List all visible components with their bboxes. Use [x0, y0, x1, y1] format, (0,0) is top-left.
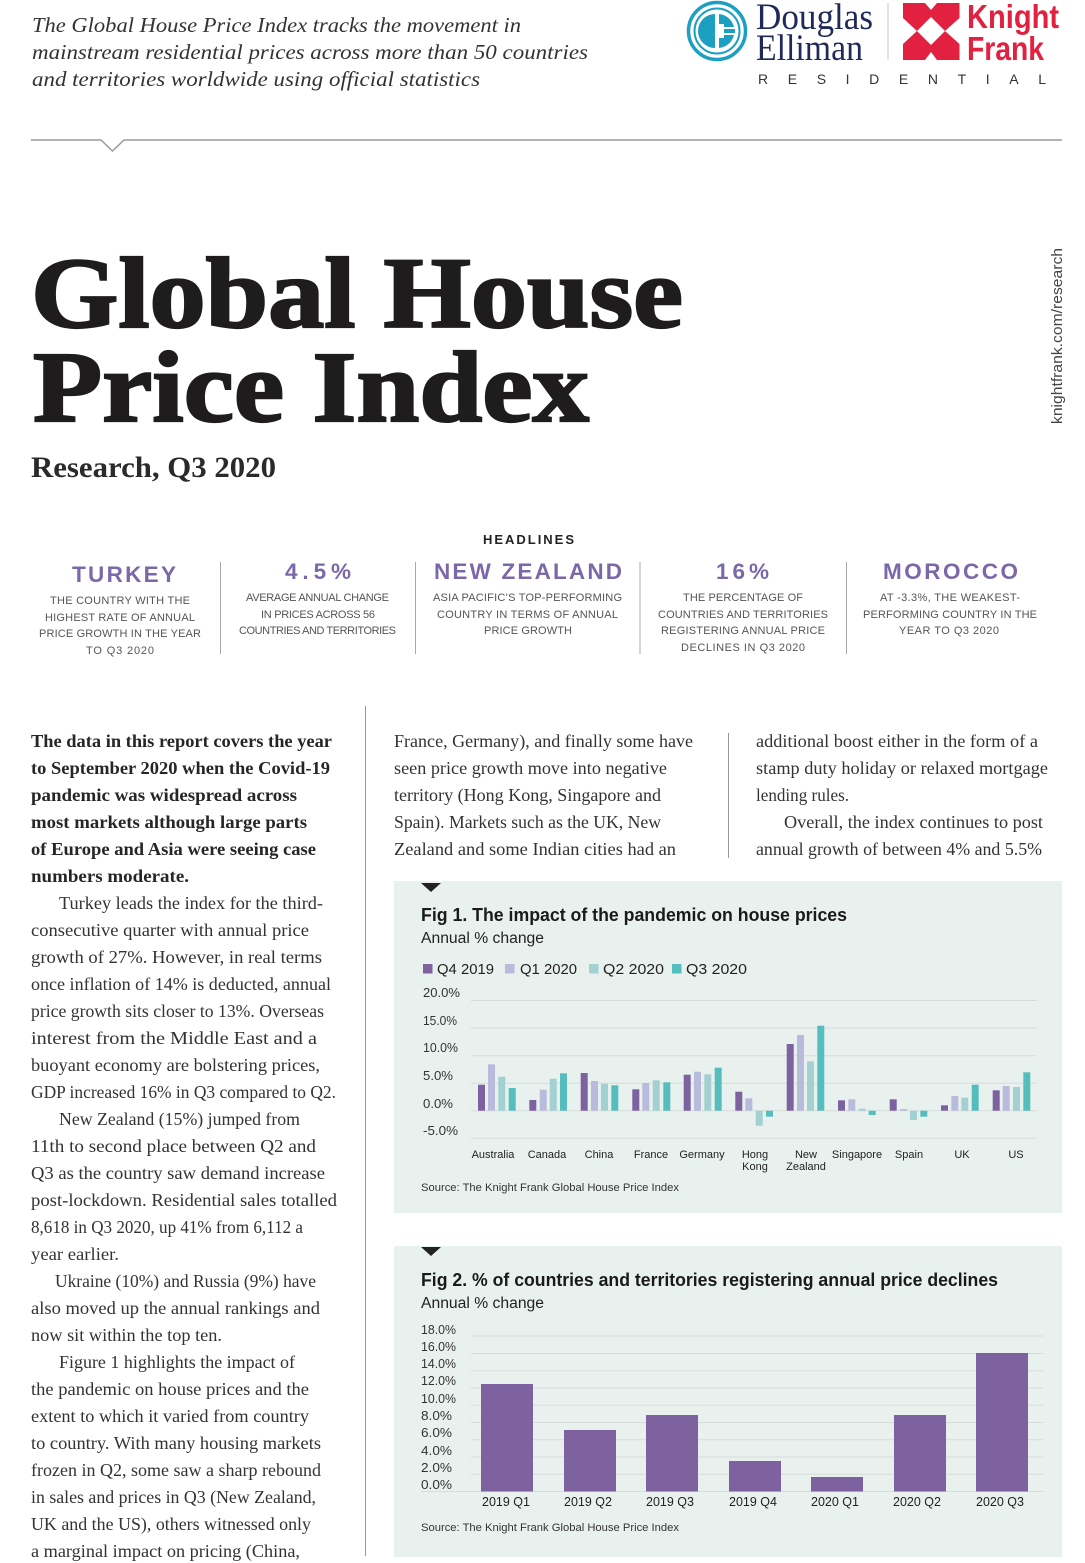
- headline: Morocco: PERFORMING COUNTRY IN THE: [863, 609, 1037, 621]
- logo: Residential: RESIDENTIAL: [758, 71, 1046, 87]
- title: [31, 237, 683, 443]
- body text column 3: additional boost either in the form of a: [756, 731, 1038, 751]
- body text column 1: to country. With many housing markets: [31, 1433, 321, 1453]
- Australia bars: [478, 1064, 516, 1111]
- intro paragraph in bold: pandemic was widespread across: [31, 785, 297, 805]
- Fig 2 period labels: 2019 Q3: [646, 1495, 694, 1509]
- body text column 1: Ukraine (10%) and Russia (9%) have: [55, 1271, 316, 1291]
- Fig 2 period labels: 2019 Q2: [564, 1495, 612, 1509]
- headline: 16%: DECLINES IN Q3 2020: [681, 642, 805, 654]
- body text column 3: [756, 731, 1048, 859]
- body text column 1: the pandemic on house prices and the: [31, 1379, 309, 1399]
- intro text: The Global House Price Index tracks the movement in: [32, 13, 521, 37]
- headline: 16%: THE PERCENTAGE OF: [683, 592, 803, 604]
- headline: Turkey: HIGHEST RATE OF ANNUAL: [45, 612, 195, 624]
- title: Price Index: [33, 331, 589, 443]
- Fig 1 bar chart: 20.0%: [423, 985, 460, 1000]
- intro paragraph in bold: numbers moderate.: [31, 866, 189, 886]
- headline: Morocco: AT -3.3%, THE WEAKEST-: [880, 592, 1020, 604]
- body text column 1: extent to which it varied from country: [31, 1406, 309, 1426]
- body text column 1: post-lockdown. Residential sales totalled: [31, 1190, 337, 1210]
- headline: 16%: [658, 559, 828, 654]
- Fig 1 country labels: Singapore: [832, 1149, 882, 1161]
- France bars: [632, 1080, 670, 1111]
- Fig 1 legend: Q2 2020: [603, 962, 664, 978]
- Fig 1 legend: [423, 962, 747, 978]
- icon: panel marker triangle: [421, 1247, 441, 1256]
- body text column 1: interest from the Middle East and a: [31, 1028, 317, 1048]
- Fig 1 bar chart: 0.0%: [423, 1096, 453, 1111]
- body text column 2: Zealand and some Indian cities had an: [394, 839, 676, 859]
- body text column 3: lending rules.: [756, 785, 849, 805]
- Fig 1 country labels: US: [1008, 1149, 1024, 1161]
- Fig 1 country labels: Kong: [742, 1161, 768, 1173]
- Canada bars: [529, 1073, 567, 1111]
- icon: panel marker triangle: [421, 883, 441, 892]
- Fig 1 bar chart: 15.0%: [423, 1013, 457, 1028]
- body text column 1: 11th to second place between Q2 and: [31, 1136, 316, 1156]
- headline: Turkey: TO Q3 2020: [86, 645, 154, 657]
- body text column 2: [394, 731, 693, 859]
- Fig 1 country labels: Spain: [895, 1149, 923, 1161]
- Fig 1 country labels: Germany: [679, 1149, 725, 1161]
- Fig 1 heading: Fig 1. The impact of the pandemic on house prices: [421, 905, 847, 925]
- Fig 1 country labels: Hong: [742, 1149, 768, 1161]
- vertical url: knightfrank.com/research: [1049, 248, 1066, 424]
- Fig 1 legend: Q1 2020: [520, 962, 577, 978]
- subtitle: Research, Q3 2020: [31, 451, 276, 484]
- headline: 4.5%: COUNTRIES AND TERRITORIES: [239, 625, 396, 637]
- logo: Douglas Elliman: Elliman: [756, 28, 863, 69]
- headline: Turkey: PRICE GROWTH IN THE YEAR: [39, 628, 201, 640]
- header rule with notch: [31, 140, 1062, 151]
- headline: New Zealand: ASIA PACIFIC’S TOP-PERFORMING: [433, 592, 622, 604]
- body text column 1: frozen in Q2, some saw a sharp rebound: [31, 1460, 321, 1480]
- body text column 1: New Zealand (15%) jumped from: [59, 1109, 300, 1129]
- body text column 2: seen price growth move into negative: [394, 758, 667, 778]
- Fig 1 legend: Q4 2019: [437, 962, 494, 978]
- headline: New Zealand: NEW ZEALAND: [434, 559, 622, 584]
- logo: Knight Frank: Frank: [967, 30, 1045, 67]
- body text column 1: Turkey leads the index for the third-: [59, 893, 323, 913]
- body text column 3: Overall, the index continues to post: [784, 812, 1043, 832]
- body text column 1: UK and the US), others witnessed only: [31, 1514, 311, 1534]
- headline: Morocco: YEAR TO Q3 2020: [899, 625, 999, 637]
- Fig 2 bar chart: 10.0%: [421, 1391, 456, 1406]
- Spain bars: [890, 1099, 927, 1120]
- Fig 2 bar chart: 14.0%: [421, 1356, 456, 1371]
- headline: 16%: COUNTRIES AND TERRITORIES: [658, 609, 828, 621]
- logo: Knight Frank: [903, 0, 1059, 67]
- headline: 4.5%: AVERAGE ANNUAL CHANGE: [246, 592, 389, 604]
- New Zealand bars: [787, 1026, 824, 1111]
- intro text: [32, 13, 588, 91]
- body text column 2: Spain). Markets such as the UK, New: [394, 812, 661, 832]
- Fig 1 country labels: Canada: [528, 1149, 567, 1161]
- title: Global House: [31, 237, 683, 349]
- body text column 3: stamp duty holiday or relaxed mortgage: [756, 758, 1048, 778]
- Fig 2 period labels: 2020 Q2: [893, 1495, 941, 1509]
- Fig 2 bar chart: 12.0%: [421, 1373, 456, 1388]
- Fig 1 country labels: New: [795, 1149, 817, 1161]
- body text column 1: now sit within the top ten.: [31, 1325, 222, 1345]
- Fig 2 bars: [481, 1353, 1028, 1492]
- Fig 1 country labels: [472, 1149, 1024, 1173]
- Fig 2 bar chart: 16.0%: [421, 1339, 456, 1354]
- intro paragraph in bold: The data in this report covers the year: [31, 731, 332, 751]
- Fig 1 source: Source: The Knight Frank Global House Price Index: [421, 1182, 680, 1194]
- panel: Fig 1: [394, 881, 1062, 1213]
- headline: 4.5%: [239, 559, 396, 637]
- body text column 1: GDP increased 16% in Q3 compared to Q2.: [31, 1082, 336, 1102]
- Fig 2 bar chart: 8.0%: [421, 1408, 452, 1423]
- Fig 2 bar chart: 4.0%: [421, 1443, 452, 1458]
- Fig 1 legend: Q3 2020: [686, 962, 747, 978]
- headline: New Zealand: PRICE GROWTH: [484, 625, 572, 637]
- Fig 2 bar chart: 6.0%: [421, 1425, 452, 1440]
- Fig 2 period labels: 2020 Q3: [976, 1495, 1024, 1509]
- intro paragraph in bold: of Europe and Asia were seeing case: [31, 839, 316, 859]
- Fig 2 heading: Fig 2. % of countries and territories registering annual price declines: [421, 1270, 998, 1290]
- headline: Morocco: [863, 559, 1037, 637]
- Fig 2 bar chart: [421, 1322, 1043, 1509]
- panel: Fig 2: [394, 1246, 1062, 1557]
- headline: Turkey: THE COUNTRY WITH THE: [50, 595, 190, 607]
- headlines heading: HEADLINES: [483, 532, 574, 547]
- Fig 1 country labels: Australia: [472, 1149, 515, 1161]
- headline: 4.5%: 4.5%: [285, 559, 351, 584]
- headline: Turkey: TURKEY: [72, 562, 176, 587]
- body text column 1: year earlier.: [31, 1244, 119, 1264]
- headline: New Zealand: [433, 559, 622, 637]
- Fig 1 country labels: Zealand: [786, 1161, 826, 1173]
- headline: 16%: 16%: [716, 559, 769, 584]
- body text column 1: consecutive quarter with annual price: [31, 920, 309, 940]
- body text column 2: France, Germany), and finally some have: [394, 731, 693, 751]
- intro paragraph in bold: most markets although large parts: [31, 812, 307, 832]
- headline: Morocco: MOROCCO: [883, 559, 1018, 584]
- body text column 1: in sales and prices in Q3 (New Zealand,: [31, 1487, 316, 1507]
- body text column 1: growth of 27%. However, in real terms: [31, 947, 322, 967]
- headlines strip: [39, 559, 1037, 657]
- Fig 1 country labels: UK: [954, 1149, 970, 1161]
- body text column 3: annual growth of between 4% and 5.5%: [756, 839, 1042, 859]
- body text column 1: Figure 1 highlights the impact of: [59, 1352, 295, 1372]
- Fig 2 bar chart: 18.0%: [421, 1322, 456, 1337]
- Fig 2 period labels: 2019 Q1: [482, 1495, 530, 1509]
- body text column 1: price growth sits closer to 13%. Overseas: [31, 1001, 324, 1021]
- body text column 1: also moved up the annual rankings and: [31, 1298, 320, 1318]
- Fig 2 period labels: 2020 Q1: [811, 1495, 859, 1509]
- body text column 1: Q3 as the country saw demand increase: [31, 1163, 325, 1183]
- Hong Kong bars: [735, 1092, 773, 1126]
- body text column 1: a marginal impact on pricing (China,: [31, 1541, 300, 1561]
- Fig 2 source: Source: The Knight Frank Global House Price Index: [421, 1522, 680, 1534]
- body text column 1: 8,618 in Q3 2020, up 41% from 6,112 a: [31, 1217, 303, 1237]
- headline: 16%: REGISTERING ANNUAL PRICE: [661, 625, 825, 637]
- headline: 4.5%: IN PRICES ACROSS 56: [261, 609, 375, 621]
- Fig 2 subheading: Annual % change: [421, 1295, 544, 1312]
- body text column 2: territory (Hong Kong, Singapore and: [394, 785, 661, 805]
- Fig 1 bar chart: 10.0%: [423, 1040, 458, 1055]
- Fig 1 country labels: China: [585, 1149, 614, 1161]
- intro paragraph in bold: [31, 731, 332, 886]
- body text column 1: once inflation of 14% is deducted, annual: [31, 974, 331, 994]
- Singapore bars: [838, 1099, 876, 1115]
- US bars: [993, 1072, 1030, 1111]
- intro text: mainstream residential prices across more than 50 countries: [32, 40, 588, 64]
- body text column 1: buoyant economy are bolstering prices,: [31, 1055, 320, 1075]
- Fig 1 bar chart: -5.0%: [423, 1123, 458, 1138]
- Fig 1 subheading: Annual % change: [421, 930, 544, 947]
- Fig 2 period labels: [482, 1495, 1024, 1509]
- UK bars: [941, 1085, 979, 1111]
- Fig 2 period labels: 2019 Q4: [729, 1495, 777, 1509]
- headline: New Zealand: COUNTRY IN TERMS OF ANNUAL: [437, 609, 618, 621]
- Fig 2 bar chart: 2.0%: [421, 1460, 452, 1475]
- intro paragraph in bold: to September 2020 when the Covid-19: [31, 758, 330, 778]
- logo: Douglas Elliman: [688, 0, 873, 69]
- China bars: [581, 1073, 618, 1111]
- headline: Turkey: [39, 562, 201, 657]
- Fig 1 bar chart: 5.0%: [423, 1068, 453, 1083]
- logo divider: [888, 3, 889, 60]
- body text column 1: [31, 731, 337, 1561]
- Germany bars: [684, 1068, 722, 1111]
- Fig 1 bar chart: [423, 985, 1037, 1173]
- intro text: and territories worldwide using official statistics: [32, 67, 480, 91]
- Fig 2 bar chart: 0.0%: [421, 1477, 452, 1492]
- Fig 1 country labels: France: [634, 1149, 668, 1161]
